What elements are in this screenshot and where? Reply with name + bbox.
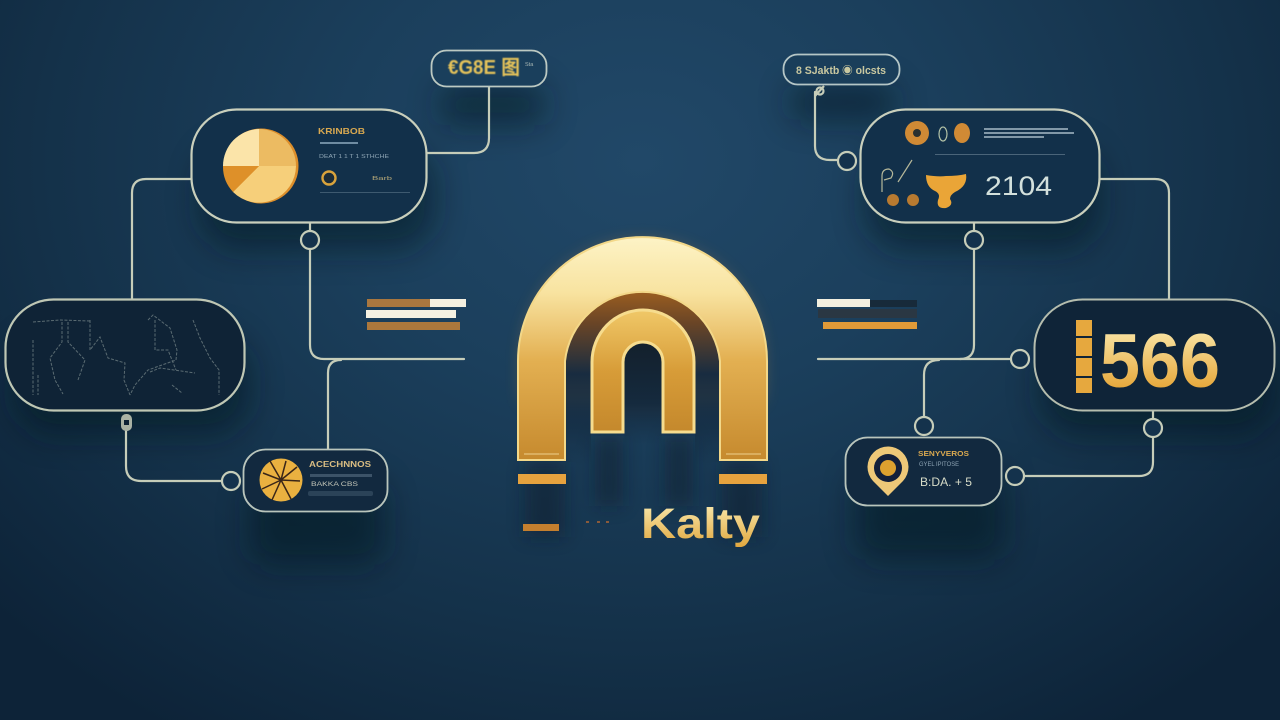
logo dash	[523, 524, 559, 531]
segmented gold bar	[1076, 320, 1092, 393]
heading: SENYVEROS	[918, 449, 969, 458]
label text: €G8E 图	[448, 57, 520, 79]
panel: top right label	[784, 54, 900, 84]
panel: line chart	[6, 300, 244, 410]
icon: map pin	[867, 447, 908, 496]
panel shadows	[15, 85, 1275, 565]
inner arch	[592, 310, 694, 432]
heading: ACECHNNOS	[309, 460, 372, 469]
body text: DEAT 1 1 T 1 STHCHE	[319, 154, 389, 160]
outer arch inset	[524, 453, 761, 455]
panel: bottom right	[846, 438, 1002, 506]
icon: knot connector	[815, 86, 824, 96]
outer arch	[518, 237, 767, 460]
pie chart	[223, 128, 298, 204]
connector lines	[126, 87, 1169, 481]
value: 566	[1100, 319, 1220, 404]
arch inner band	[565, 284, 720, 465]
panel: top left label	[432, 50, 546, 86]
inner opening	[624, 343, 662, 445]
panel: top left pie	[192, 110, 426, 222]
body text: GYEL IPITOSE	[919, 462, 959, 468]
icon: plug connector	[121, 414, 132, 431]
bars: right	[817, 299, 917, 329]
connector nodes	[222, 152, 1162, 490]
panel: bottom left	[244, 450, 388, 512]
arch glow	[525, 243, 760, 400]
logo dots	[586, 521, 609, 523]
small text: Barb	[372, 176, 392, 182]
sketch line chart	[33, 315, 219, 395]
sketch icons	[882, 160, 919, 206]
panel: number	[1034, 300, 1274, 410]
value text: B:DA. + 5	[920, 475, 972, 489]
label text: 8 SJaktb ◉ olcsts	[796, 64, 886, 77]
icons row	[905, 121, 970, 145]
arch shadows	[525, 436, 762, 537]
icon: segmented wheel	[260, 458, 302, 502]
heading: KRINBOB	[318, 126, 365, 136]
header text lines	[935, 128, 1074, 155]
small icon	[322, 172, 336, 184]
body text: BAKKA CBS	[311, 481, 359, 488]
arch foot bars	[518, 474, 767, 484]
panel: top right stats	[860, 110, 1100, 222]
value: 2104	[985, 171, 1052, 201]
icon: gold cup	[926, 174, 966, 208]
bars: left	[366, 299, 466, 330]
label small text: Sta	[525, 62, 534, 68]
central arch logo	[518, 237, 767, 465]
logo wordmark: Kalty	[641, 500, 760, 548]
